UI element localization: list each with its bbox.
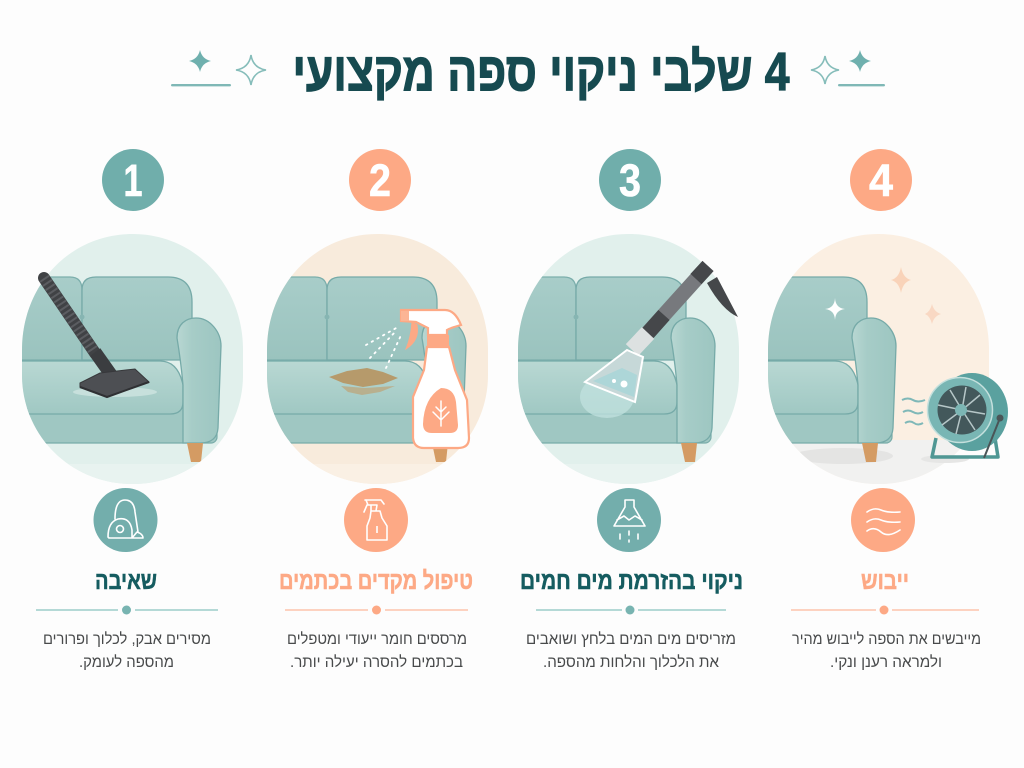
description bbox=[43, 631, 211, 671]
title decoration left bbox=[171, 50, 266, 86]
description: מזריסים מים המים בלחץ ושואבים bbox=[526, 631, 736, 648]
description: מהספה לעומק. bbox=[79, 654, 174, 671]
number badge 4 bbox=[850, 149, 912, 211]
illustration: drying with a fan bbox=[768, 234, 1008, 484]
divider bbox=[285, 606, 468, 614]
number badge 1: 1 bbox=[124, 155, 142, 206]
number badge 4: 4 bbox=[869, 155, 893, 206]
icon: vacuum cleaner bbox=[94, 488, 158, 552]
number badge 1 bbox=[102, 149, 164, 211]
number badge 3 bbox=[599, 149, 661, 211]
illustration: vacuuming the sofa bbox=[22, 234, 243, 484]
heading: spot pre-treatment: טיפול מקדים בכתמים bbox=[279, 568, 473, 595]
description: ולמראה רענן ונקי. bbox=[830, 654, 942, 671]
illustration: spot treatment spray bbox=[267, 234, 488, 484]
illustration: hot water extraction bbox=[518, 234, 739, 484]
step 4 bbox=[768, 149, 1008, 670]
description: את הלכלוך והלחות מהספה. bbox=[543, 654, 719, 671]
number badge 3: 3 bbox=[619, 155, 641, 206]
heading: drying: ייבוש bbox=[861, 568, 909, 595]
title decoration right bbox=[811, 50, 885, 86]
number badge 2: 2 bbox=[369, 155, 391, 206]
divider bbox=[36, 606, 218, 614]
step 1 bbox=[22, 149, 243, 670]
description bbox=[287, 631, 467, 671]
step 3 bbox=[518, 149, 742, 670]
title: 4 שלבי ניקוי ספה מקצועי bbox=[292, 42, 790, 102]
divider bbox=[536, 606, 726, 614]
icon: drying air waves bbox=[851, 488, 915, 552]
description: מסירים אבק, לכלוך ופרורים bbox=[43, 631, 211, 648]
icon: extraction nozzle with drops bbox=[597, 488, 661, 552]
description bbox=[792, 631, 981, 671]
heading: vacuuming: שאיבה bbox=[95, 568, 157, 595]
description: בכתמים להסרה יעילה יותר. bbox=[290, 654, 463, 671]
divider bbox=[791, 606, 979, 614]
description: מייבשים את הספה לייבוש מהיר bbox=[792, 631, 981, 648]
description: מרססים חומר ייעודי ומטפלים bbox=[287, 631, 467, 648]
step 2 bbox=[267, 149, 488, 668]
heading: hot water extraction: ניקוי בהזרמת מים חמים bbox=[520, 568, 743, 595]
number badge 2 bbox=[349, 149, 411, 211]
description bbox=[526, 631, 736, 671]
icon: spray bottle bbox=[344, 488, 408, 552]
